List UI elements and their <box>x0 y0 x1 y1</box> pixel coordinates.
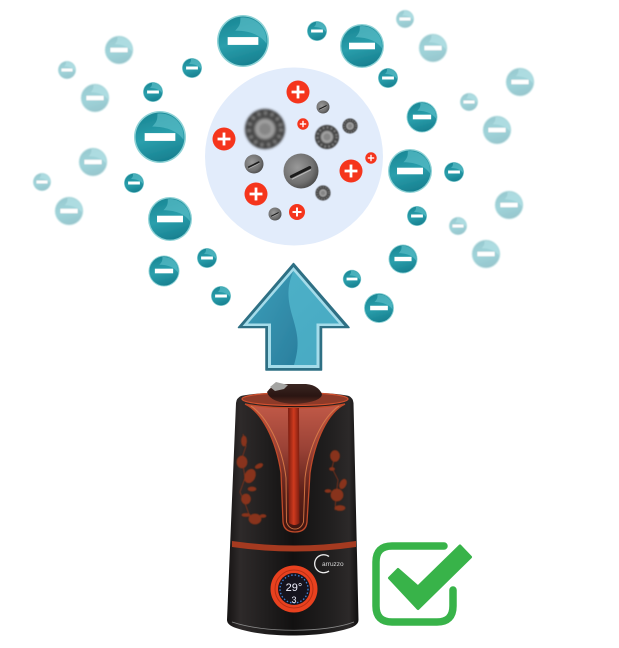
control dial: 29° <box>286 582 302 594</box>
central water column <box>288 408 300 525</box>
humidifier <box>227 382 358 636</box>
floral decoration right <box>325 450 348 510</box>
bacteria particles <box>244 100 330 220</box>
check box outline <box>376 546 453 622</box>
water tank funnel <box>245 404 345 532</box>
floral decoration left <box>237 434 266 524</box>
negative ions: faded <box>33 10 535 269</box>
funnel outer highlight <box>251 406 339 529</box>
positive ions <box>212 80 377 220</box>
brand logo <box>315 555 344 573</box>
negative ions: saturated <box>124 15 464 323</box>
control dial <box>270 566 318 612</box>
control dial: 3 <box>291 595 297 605</box>
humidifier body <box>227 392 358 636</box>
top rim <box>242 392 348 406</box>
virus particles <box>245 109 358 200</box>
panel: pollutants circle <box>205 68 383 246</box>
top cap <box>267 384 322 404</box>
check tick <box>390 546 470 608</box>
brand logo: arruzzo <box>322 561 344 568</box>
mist nozzle <box>270 382 288 391</box>
arrow pointing up <box>238 264 349 370</box>
base highlight <box>232 622 354 630</box>
red band <box>232 541 356 552</box>
green check mark <box>376 546 470 622</box>
